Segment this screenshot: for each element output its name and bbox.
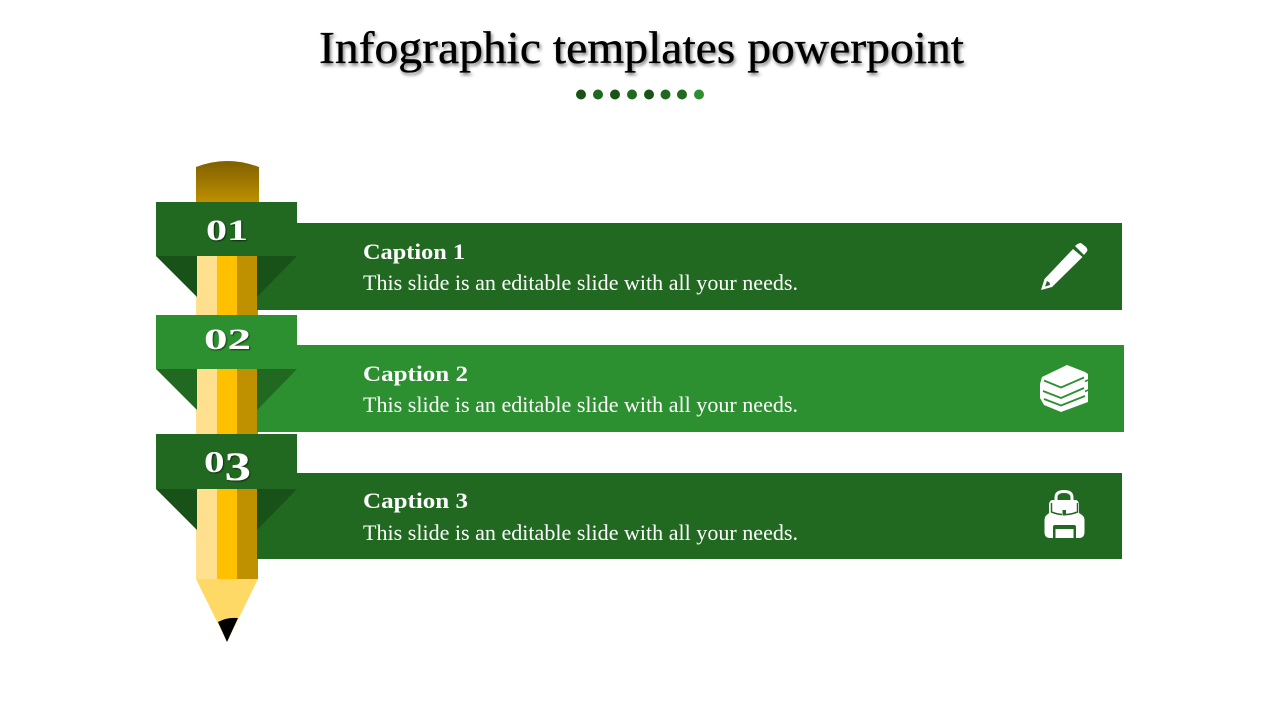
caption 2 text: This slide is an editable slide with all your needs. (363, 392, 798, 417)
number 02: 02 (204, 323, 251, 356)
ribbon 02 (156, 315, 297, 410)
icon: books (1040, 365, 1088, 412)
icon: pencil (1041, 243, 1087, 290)
number 01: 01 (206, 214, 248, 247)
title: Infographic templates powerpoint (319, 22, 964, 73)
number 03: 0 (204, 444, 220, 479)
caption 1 heading: Caption 1 (363, 239, 465, 264)
panel: caption 2 (257, 345, 1124, 432)
panel: caption 1 (257, 223, 1122, 310)
caption 2 heading: Caption 2 (363, 361, 468, 386)
ribbon 01 (156, 202, 297, 297)
caption 3 text: This slide is an editable slide with all your needs. (363, 520, 798, 545)
caption 3 heading: Caption 3 (363, 488, 468, 513)
panel: caption 3 (257, 473, 1122, 559)
pencil (196, 161, 259, 642)
caption 1 text: This slide is an editable slide with all your needs. (363, 270, 798, 295)
icon: backpack (1044, 492, 1084, 538)
title dots (576, 90, 704, 100)
ribbon 03 (156, 434, 297, 530)
number 03: 3 (225, 444, 251, 489)
